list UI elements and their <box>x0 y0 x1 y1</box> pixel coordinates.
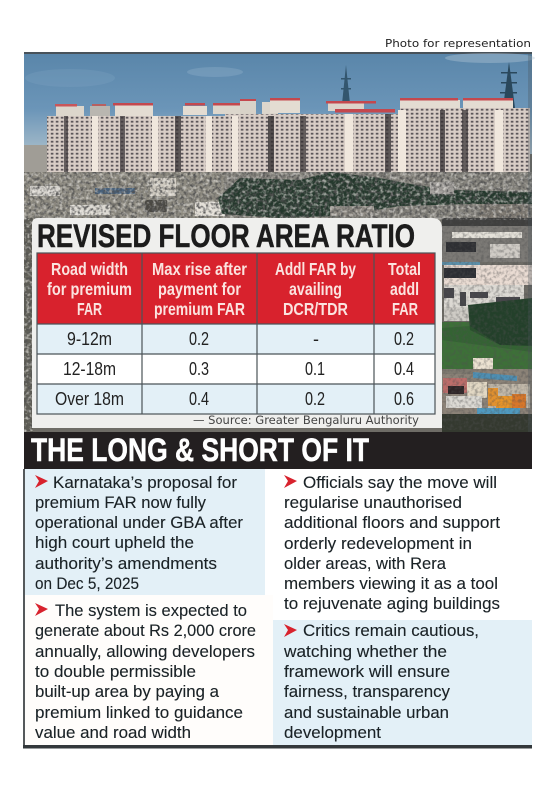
table row: 12-18m: 0.3 <box>189 359 209 379</box>
text block: revenue system: annually, allowing developers <box>35 642 255 661</box>
text block: proposal: premium FAR now fully <box>35 493 206 512</box>
table header row: FAR <box>392 299 418 319</box>
table row: 9-12m: 0.2 <box>189 329 209 349</box>
table header row: Addl FAR by <box>275 259 356 279</box>
table row: 9-12m: 0.2 <box>394 329 414 349</box>
table row: over 18m: Over 18m <box>55 389 124 409</box>
text block: critics: watching whether the <box>283 642 447 661</box>
table header row: FAR <box>77 299 102 319</box>
text block: revenue system: to double permissible <box>35 662 196 681</box>
table header row: DCR/TDR <box>283 299 348 319</box>
table header row: payment for <box>158 279 241 299</box>
text block: revenue system <box>35 601 256 742</box>
text block: critics: and sustainable urban <box>284 703 449 722</box>
icon: red arrow <box>35 475 48 488</box>
table row: 12-18m: 0.4 <box>394 359 414 379</box>
table row: over 18m <box>55 389 414 409</box>
table header row <box>47 259 421 319</box>
icon: transmission tower left <box>341 65 351 104</box>
text block: revenue system: built-up area by paying a <box>35 682 220 701</box>
text block: critics <box>283 621 479 742</box>
table row: 12-18m: 0.1 <box>305 359 325 379</box>
text block: critics: framework will ensure <box>284 662 450 681</box>
text block: critics: fairness, transparency <box>284 682 450 701</box>
table header row: addl <box>390 279 419 299</box>
text block: proposal: high court upheld the <box>35 533 194 552</box>
icon: red arrow <box>284 475 297 488</box>
text block: officials: regularise unauthorised <box>284 493 462 512</box>
left strip <box>24 218 33 432</box>
text block: proposal: operational under GBA after <box>35 513 243 532</box>
text block: officials <box>284 473 500 613</box>
text block: revenue system: The system is expected to <box>55 601 247 620</box>
text block: revenue system: value and road width <box>35 723 191 742</box>
table row: 9-12m: - <box>313 329 319 349</box>
icon: red arrow <box>284 624 297 637</box>
text block: officials: older areas, with Rera <box>284 554 447 573</box>
text block: officials: additional floors and support <box>284 513 500 532</box>
heading: revised floor area ratio: REVISED FLOOR AREA RATIO <box>37 218 415 254</box>
table row: 12-18m: 12-18m <box>63 359 116 379</box>
table header row: Total <box>388 259 421 279</box>
table row: 12-18m <box>63 359 414 379</box>
table: FAR values <box>37 253 435 414</box>
text block: officials: to rejuvenate aging buildings <box>284 594 500 613</box>
panel backgrounds <box>25 469 532 745</box>
table row: over 18m: 0.2 <box>305 389 325 409</box>
table header row: premium FAR <box>154 299 245 319</box>
text block: proposal: on Dec 5, 2025 <box>35 574 139 593</box>
table header row: availing <box>289 279 342 299</box>
text block: officials: orderly redevelopment in <box>284 534 472 553</box>
text block: officials: Officials say the move will <box>303 473 497 492</box>
photo credit: Photo for representation <box>385 37 531 50</box>
source note: — Source: Greater Bengaluru Authority <box>193 413 419 427</box>
panel: revised floor area ratio <box>32 218 442 428</box>
text block: critics: Critics remain cautious, <box>303 621 479 640</box>
icon: transmission tower right <box>500 62 517 108</box>
text block: revenue system: generate about Rs 2,000 crore <box>35 621 256 640</box>
table row: over 18m: 0.6 <box>394 389 414 409</box>
lower city housing <box>24 145 532 220</box>
text block: critics: development <box>284 723 381 742</box>
frame lines <box>23 469 532 748</box>
text block: proposal: Karnataka’s proposal for <box>53 473 237 492</box>
icon: red arrow <box>35 603 48 616</box>
table header row: Road width <box>51 259 128 279</box>
text block: officials: members viewing it as a tool <box>284 574 498 593</box>
table row: over 18m: 0.4 <box>189 389 209 409</box>
rooftops <box>55 98 513 116</box>
text block: proposal: authority’s amendments <box>35 554 217 573</box>
lower right housing and hillside <box>442 218 532 432</box>
text block: revenue system: premium linked to guidance <box>35 703 243 722</box>
heading band: the long and short of it: THE LONG & SHORT OF IT <box>31 432 369 468</box>
table row: 9-12m: 9-12m <box>67 329 112 349</box>
text block: proposal <box>35 473 243 593</box>
apartment blocks <box>47 108 530 178</box>
table row: 9-12m <box>67 329 414 349</box>
table header row: for premium <box>47 279 132 299</box>
photo: residential towers skyline <box>24 52 535 432</box>
table header row: Max rise after <box>152 259 247 279</box>
